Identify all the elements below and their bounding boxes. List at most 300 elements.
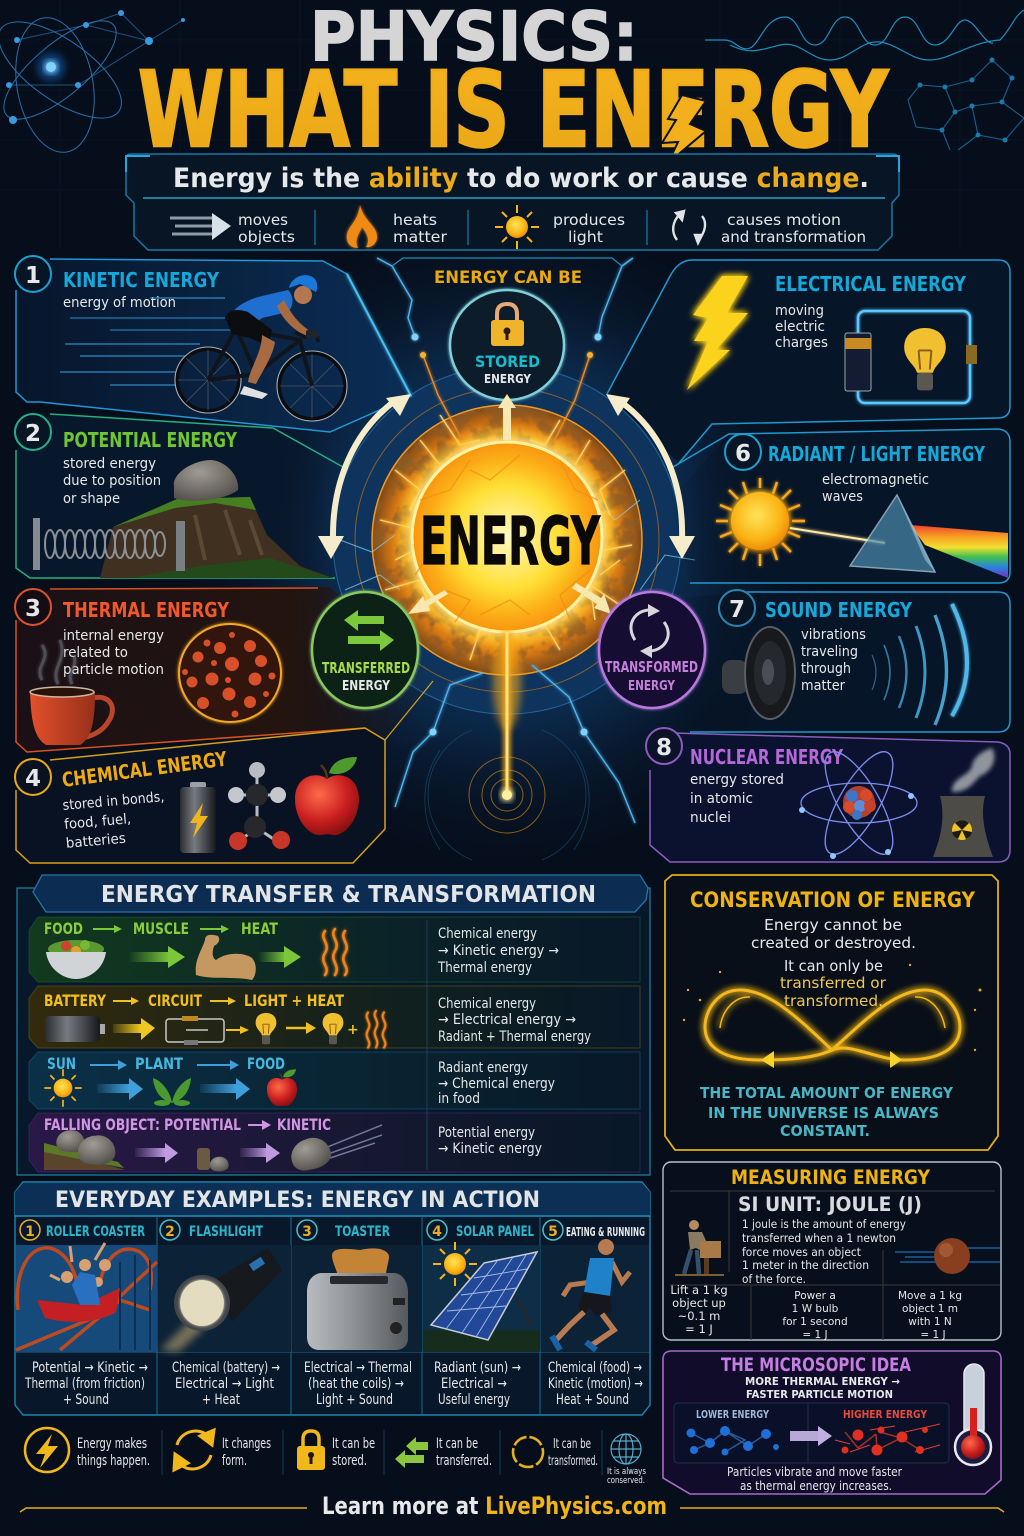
text: it can be transformed: [548, 1436, 598, 1469]
example: eating and running: [541, 1220, 649, 1352]
text: energy chain: Radiant + Thermal energy: [438, 1029, 591, 1045]
panel: measuring energy: [663, 1162, 1001, 1341]
text: sound description: through: [801, 661, 851, 677]
icon: transfer arrows: [344, 610, 394, 651]
icon: lightning bolt: [687, 276, 748, 390]
icon: flame: [347, 205, 377, 248]
icon: lightning in title: [662, 95, 706, 163]
icon: arrow moves objects: [170, 213, 231, 240]
badge 4: 4: [25, 766, 41, 792]
icon: bulb: [256, 1013, 276, 1044]
badge 3: [15, 589, 51, 625]
text: total amount: [700, 1084, 954, 1140]
example: flashlight: FLASHLIGHT: [189, 1224, 263, 1240]
captions: Thermal (from friction): [24, 1376, 145, 1392]
row: falling object: [29, 1113, 640, 1174]
text: lift example: object up: [672, 1296, 726, 1310]
light beam: [790, 528, 885, 543]
badge 8: 8: [656, 735, 672, 761]
vertical energy beam and rings: [425, 630, 589, 860]
text: radiant description: [822, 472, 929, 505]
arrowheads on loop: [761, 1051, 902, 1068]
heading: sound: SOUND ENERGY: [765, 598, 912, 622]
heading: electrical: ELECTRICAL ENERGY: [775, 272, 966, 296]
flow labels: [44, 991, 344, 1010]
text: only transferred: transferred or: [780, 974, 887, 992]
badge 7: 7: [729, 597, 745, 623]
badge 2: [15, 414, 51, 450]
text: transferred: TRANSFERRED: [322, 659, 410, 677]
flow labels: PLANT: [135, 1054, 183, 1073]
example: roller coaster: [16, 1220, 157, 1352]
text: it can be stored: [332, 1436, 375, 1469]
decoration: hexagon network top-right: [908, 58, 1024, 150]
text: it can be transferred: It can be: [436, 1436, 478, 1452]
icon: boulder: [174, 460, 238, 501]
text: only transferred: transformed.: [784, 992, 883, 1010]
captions: Radiant (sun) →: [434, 1360, 521, 1376]
subheading: FASTER PARTICLE MOTION: [746, 1389, 893, 1401]
icon: heat waves: [367, 1011, 385, 1048]
subheading: SI UNIT: JOULE (J): [738, 1193, 922, 1216]
text: energy of motion: energy of motion: [63, 295, 176, 311]
example: roller coaster: ROLLER COASTER: [46, 1224, 145, 1240]
arrow: right cycle arc: [606, 394, 695, 559]
icon: globe: [611, 1434, 641, 1464]
icon: rainbow: [910, 525, 1008, 578]
icon: toast: [332, 1248, 389, 1288]
icon: sun: [44, 1069, 82, 1107]
icon: coffee mug: [30, 687, 112, 745]
panel: energy transfer and transformation: [17, 875, 650, 1175]
heading: chemical: CHEMICAL ENERGY: [61, 746, 229, 792]
arrow: lower to higher: [790, 1426, 832, 1446]
flow labels: [47, 1054, 285, 1073]
text: total amount: THE TOTAL AMOUNT OF ENERGY: [700, 1084, 954, 1102]
text: particles vibrate: Particles vibrate and move faster: [727, 1464, 903, 1479]
arrow: circuit to bulb: [226, 1026, 249, 1034]
panel: conservation of energy: [665, 875, 998, 1150]
text: energy chain: [438, 1125, 542, 1157]
captions: + Sound: [63, 1392, 109, 1408]
captions: Chemical (battery) →: [172, 1360, 280, 1376]
text: causes motion: [721, 211, 866, 246]
example: solar panel: [423, 1220, 540, 1352]
text: thermal description: related to: [63, 645, 128, 661]
icon: speaker: [722, 627, 795, 719]
icon: worker lifting box: [675, 1220, 724, 1275]
text: stored: STORED: [475, 352, 540, 371]
text: it can be transferred: transferred.: [436, 1453, 492, 1469]
text: it changes form: [222, 1436, 271, 1469]
text: move example: [898, 1290, 962, 1341]
row: sun: [29, 1052, 640, 1109]
example: solar panel: 4: [432, 1224, 442, 1240]
text: thermal description: internal energy: [63, 628, 164, 644]
text: move example: object 1 m: [902, 1303, 958, 1315]
title: PHYSICS:: [310, 0, 638, 77]
text: heats matter: [393, 211, 448, 246]
heading band: EVERYDAY EXAMPLES: ENERGY IN ACTION: [55, 1187, 540, 1213]
badge 4: [15, 759, 51, 795]
icon: sun: [433, 1242, 477, 1286]
icon: battery: [845, 333, 871, 391]
icon: falling rocks: [197, 1148, 229, 1171]
panel: electrical energy: [607, 260, 1010, 463]
flow labels: KINETIC: [277, 1115, 331, 1134]
text: energy chain: → Kinetic energy: [438, 1141, 542, 1157]
badge 8: [646, 728, 682, 764]
text: bulb example: for 1 second: [782, 1316, 848, 1328]
icon: rocks on ledge: [44, 1130, 125, 1170]
icon: track and car: [16, 1248, 157, 1350]
text: potential description: [63, 456, 161, 507]
text: energy makes things happen: things happen.: [77, 1453, 150, 1469]
row: battery: [29, 986, 640, 1048]
text: energy chain: in food: [438, 1091, 480, 1107]
panel: nuclear energy: [646, 728, 1010, 863]
icon: meteor: [287, 1125, 382, 1174]
flow labels: FOOD: [44, 919, 83, 938]
arrow: falling to moving: [240, 1143, 280, 1163]
text: move example: = 1 J: [920, 1329, 946, 1341]
heading band: [15, 1183, 650, 1215]
icon: flexed arm: [196, 935, 256, 980]
heading banner: ENERGY TRANSFER & TRANSFORMATION: [101, 882, 596, 908]
panel: potential energy: [15, 414, 343, 578]
text: causes motion: causes motion: [727, 211, 841, 229]
text: moves objects: moves: [238, 211, 288, 229]
text: energy chain: Radiant energy: [438, 1060, 528, 1076]
captions: Kinetic (motion) →: [548, 1376, 643, 1392]
text: energy chain: Thermal energy: [437, 960, 532, 976]
text: chemical description: [62, 789, 168, 852]
title: [138, 0, 889, 171]
text: heats matter: matter: [393, 228, 448, 246]
heading: CONSERVATION OF ENERGY: [690, 888, 975, 913]
text: only transferred: [780, 957, 887, 1010]
text: energy: ENERGY: [628, 679, 675, 694]
heading banner: [33, 875, 648, 912]
example: toaster: TOASTER: [335, 1224, 390, 1240]
text: particles vibrate: as thermal energy increases.: [740, 1478, 892, 1493]
text: energy chain: [437, 926, 559, 976]
text: it can be transformed: transformed.: [548, 1453, 598, 1469]
text: electrical description: charges: [775, 335, 828, 351]
badge 1: 1: [25, 263, 41, 289]
icon: toaster body: [307, 1273, 408, 1350]
central energy sun: [332, 365, 695, 715]
row: food: [29, 917, 640, 982]
icon: runner: [552, 1239, 630, 1350]
example: flashlight: [158, 1220, 291, 1352]
captions: Heat + Sound: [556, 1392, 629, 1408]
icon: lock: [491, 304, 524, 346]
icon: heat waves: [323, 929, 347, 975]
arrow: sun to plant: [97, 1078, 143, 1100]
icon: spring: [33, 518, 185, 571]
arrow: up to stored: [498, 394, 516, 440]
text: potential description: stored energy: [63, 456, 156, 472]
text: causes motion: and transformation: [721, 228, 866, 246]
icon: moving ball: [895, 1238, 1000, 1274]
icon: sun: [716, 478, 805, 566]
subheading: MORE THERMAL ENERGY →: [745, 1376, 900, 1388]
text: electrical description: [775, 303, 828, 351]
text: transformed: TRANSFORMED: [605, 658, 698, 676]
heading: nuclear: NUCLEAR ENERGY: [690, 745, 843, 769]
text: energy chain: [438, 1060, 555, 1107]
text: lift example: = 1 J: [685, 1322, 713, 1336]
icon: bulb: [323, 1013, 343, 1044]
icon: circuit: [166, 1016, 224, 1045]
icon: infinity loop: [705, 990, 960, 1060]
flow labels: HEAT: [241, 919, 278, 938]
definition box: [126, 154, 899, 250]
text: it changes form: It changes: [222, 1436, 271, 1452]
panel: sound energy: [660, 590, 1010, 732]
flow labels: SUN: [47, 1054, 76, 1073]
arrow: bulb to bulb: [286, 1022, 316, 1034]
flow labels: CIRCUIT: [148, 991, 202, 1010]
text: it can be transferred: [436, 1436, 492, 1469]
flow labels: [44, 919, 278, 938]
text: cannot be created: Energy cannot be: [764, 916, 902, 934]
icon: sound waves: [872, 604, 967, 725]
arrow: left cycle arc: [318, 394, 411, 559]
icon: bowl: [46, 940, 106, 979]
text: joule definition: force moves an object: [742, 1245, 861, 1259]
text: lift example: Lift a 1 kg: [670, 1283, 728, 1297]
example: flashlight: 2: [165, 1224, 175, 1240]
icon: apple: [295, 757, 359, 835]
text: produces light: light: [568, 228, 603, 246]
flow labels: LIGHT + HEAT: [244, 991, 344, 1010]
text: move example: Move a 1 kg: [898, 1290, 962, 1302]
arrow: rock to falling: [135, 1143, 178, 1163]
badge: stored energy: [450, 290, 564, 400]
text: energy chain: → Electrical energy →: [438, 1012, 576, 1028]
panel: radiant light energy: [668, 429, 1010, 583]
text: joule definition: [742, 1217, 906, 1286]
legend strip: [25, 1428, 646, 1486]
badge 2: 2: [25, 421, 41, 447]
text: moves objects: objects: [238, 228, 295, 246]
icon: battery: [45, 1016, 105, 1042]
text: energy chain: Chemical energy: [438, 996, 536, 1012]
example: toaster: 3: [302, 1224, 312, 1240]
panel: chemical energy: [15, 728, 385, 863]
arrow: to transformed: [572, 583, 611, 614]
text: it can be stored: stored.: [332, 1453, 367, 1469]
text: bulb example: = 1 J: [802, 1329, 828, 1341]
text: energy chain: → Kinetic energy →: [438, 943, 559, 959]
badge: transformed energy: [599, 592, 705, 708]
flow labels: FOOD: [247, 1054, 285, 1073]
decoration: atom network top-left: [0, 4, 185, 159]
panel: kinetic energy: [15, 256, 411, 432]
text: electrical description: electric: [775, 319, 825, 335]
text: heats matter: heats: [393, 211, 437, 229]
heading: potential: POTENTIAL ENERGY: [63, 428, 237, 452]
icon: prism: [850, 495, 935, 572]
text: bulb example: Power a: [794, 1290, 836, 1302]
captions: Electrical → Thermal: [304, 1360, 412, 1376]
captions: [24, 1360, 643, 1408]
label: higher energy: HIGHER ENERGY: [843, 1409, 927, 1421]
badge: transferred energy: [312, 592, 418, 708]
badge 7: [719, 590, 755, 626]
text: joule definition: 1 joule is the amount of energy: [742, 1217, 906, 1231]
particles: [683, 964, 982, 1051]
tagline: Energy is the ability to do work or cause change.: [173, 163, 869, 194]
icon: transfer arrows: [395, 1437, 428, 1468]
icon: cooling tower: [933, 748, 994, 857]
footer text: Learn more at LivePhysics.com: [322, 1492, 667, 1520]
icon: atom: [799, 743, 917, 863]
text: sound description: traveling: [801, 644, 858, 660]
text: radiant description: electromagnetic: [822, 472, 929, 488]
text: lift example: ~0.1 m: [678, 1309, 720, 1323]
example: roller coaster: 1: [25, 1224, 35, 1240]
text: bulb example: [782, 1290, 848, 1341]
text: chemical description: batteries: [65, 831, 126, 852]
example: eating and running: EATING & RUNNING: [566, 1224, 645, 1239]
arrow: plant to food: [200, 1078, 250, 1100]
text: energy: ENERGY: [342, 679, 390, 694]
text: sound description: [801, 627, 866, 694]
icon: thermometer: [955, 1364, 991, 1465]
text: joule definition: of the force.: [742, 1272, 806, 1286]
text: potential description: or shape: [63, 491, 120, 507]
text: chemical description: stored in bonds,: [62, 789, 165, 814]
badge 6: 6: [735, 441, 751, 467]
badge 1: [15, 256, 51, 292]
plus sign: +: [347, 1022, 359, 1038]
particles: lower: [686, 1426, 779, 1456]
text: nuclear description: [690, 772, 784, 826]
text: potential description: due to position: [63, 473, 161, 489]
icon: hill: [100, 497, 333, 578]
captions: Potential → Kinetic →: [32, 1360, 148, 1376]
panel: energy can be: [392, 258, 622, 400]
text: move example: with 1 N: [908, 1316, 952, 1328]
panel: everyday examples: [15, 1182, 650, 1415]
arrow: battery to circuit: [113, 1018, 155, 1040]
particle comparison box: [674, 1403, 949, 1463]
icon: rotate arrows: [631, 604, 668, 658]
subheading: [745, 1376, 900, 1401]
text: joule definition: transferred when a 1 newton: [742, 1231, 896, 1245]
icon: sun: [495, 205, 539, 249]
text: lift example: [670, 1283, 728, 1336]
text: particles vibrate: [727, 1464, 903, 1493]
text: always conserved: It is always: [607, 1467, 646, 1477]
flow labels: BATTERY: [44, 991, 106, 1010]
icon: change cycle: [174, 1430, 214, 1470]
captions: Light + Sound: [316, 1392, 393, 1408]
text: it can be stored: It can be: [332, 1436, 375, 1452]
speed lines: [60, 298, 232, 385]
text: energy makes things happen: Energy makes: [77, 1436, 147, 1452]
badge 6: [725, 434, 761, 470]
arrow: to transferred: [408, 590, 448, 614]
footer: [20, 1492, 1004, 1520]
captions: Electrical →: [441, 1376, 507, 1392]
icon: battery: [180, 782, 216, 853]
heading: kinetic: KINETIC ENERGY: [63, 268, 219, 292]
text: produces light: produces: [553, 211, 625, 229]
text: total amount: CONSTANT.: [780, 1122, 870, 1140]
text: only transferred: It can only be: [784, 957, 883, 975]
text: cannot be created: [751, 916, 916, 952]
text: nuclear description: in atomic: [690, 791, 753, 807]
icon: plant: [153, 1078, 191, 1106]
text: energy makes things happen: [77, 1436, 150, 1469]
text: it changes form: form.: [222, 1453, 247, 1469]
text: it can be transformed: It can be: [553, 1436, 591, 1452]
captions: + Heat: [202, 1392, 240, 1408]
text: produces light: [553, 211, 625, 246]
example: toaster: [292, 1220, 422, 1352]
text: energy chain: [438, 996, 591, 1045]
heading: energy can be: ENERGY CAN BE: [434, 268, 582, 287]
heading: THE MICROSOPIC IDEA: [721, 1355, 912, 1376]
decoration: wave lines top-right: [705, 10, 1024, 60]
text: bulb example: 1 W bulb: [792, 1303, 839, 1315]
icon: lock: [297, 1431, 325, 1470]
text: chemical description: food, fuel,: [64, 811, 132, 833]
flow labels: MUSCLE: [133, 919, 189, 938]
heading: MEASURING ENERGY: [731, 1166, 931, 1189]
label: lower energy: LOWER ENERGY: [696, 1409, 769, 1421]
particles: higher: [835, 1424, 940, 1456]
text: cannot be created: created or destroyed.: [751, 934, 916, 952]
example: solar panel: SOLAR PANEL: [456, 1224, 534, 1240]
captions: Chemical (food) →: [548, 1360, 642, 1376]
icon: apple: [267, 1069, 297, 1106]
lightning bolts around sun: [377, 258, 635, 823]
text: nuclear description: nuclei: [690, 810, 731, 826]
text: moves objects: [238, 211, 295, 246]
arrow: muscle to heat: [258, 946, 301, 968]
label: ENERGY: ENERGY: [420, 503, 601, 580]
badge 3: 3: [25, 596, 41, 622]
flow labels: FALLING OBJECT: POTENTIAL: [44, 1115, 241, 1134]
icon: bulb: [904, 328, 946, 390]
captions: Electrical → Light: [175, 1376, 274, 1392]
text: radiant description: waves: [822, 489, 863, 505]
icon: transform cycle: [513, 1437, 543, 1467]
captions: Useful energy: [438, 1392, 510, 1408]
text: always conserved: conserved.: [607, 1476, 645, 1486]
icon: particle sphere: [179, 624, 281, 722]
text: thermal description: particle motion: [63, 662, 164, 678]
icon: cyclist: [175, 275, 347, 421]
text: total amount: IN THE UNIVERSE IS ALWAYS: [708, 1104, 939, 1122]
text: energy chain: Chemical energy: [438, 926, 537, 942]
example: eating and running: 5: [548, 1224, 558, 1240]
icon: bolt in circle: [25, 1428, 69, 1472]
icon: flashlight: [160, 1320, 205, 1352]
icon: switch: [966, 345, 977, 364]
text: sound description: vibrations: [801, 627, 866, 643]
icon: molecule: [228, 762, 290, 850]
icon: circuit: [858, 311, 970, 403]
text: always conserved: [607, 1467, 646, 1486]
text: nuclear description: energy stored: [690, 772, 784, 788]
text: electrical description: moving: [775, 303, 824, 319]
